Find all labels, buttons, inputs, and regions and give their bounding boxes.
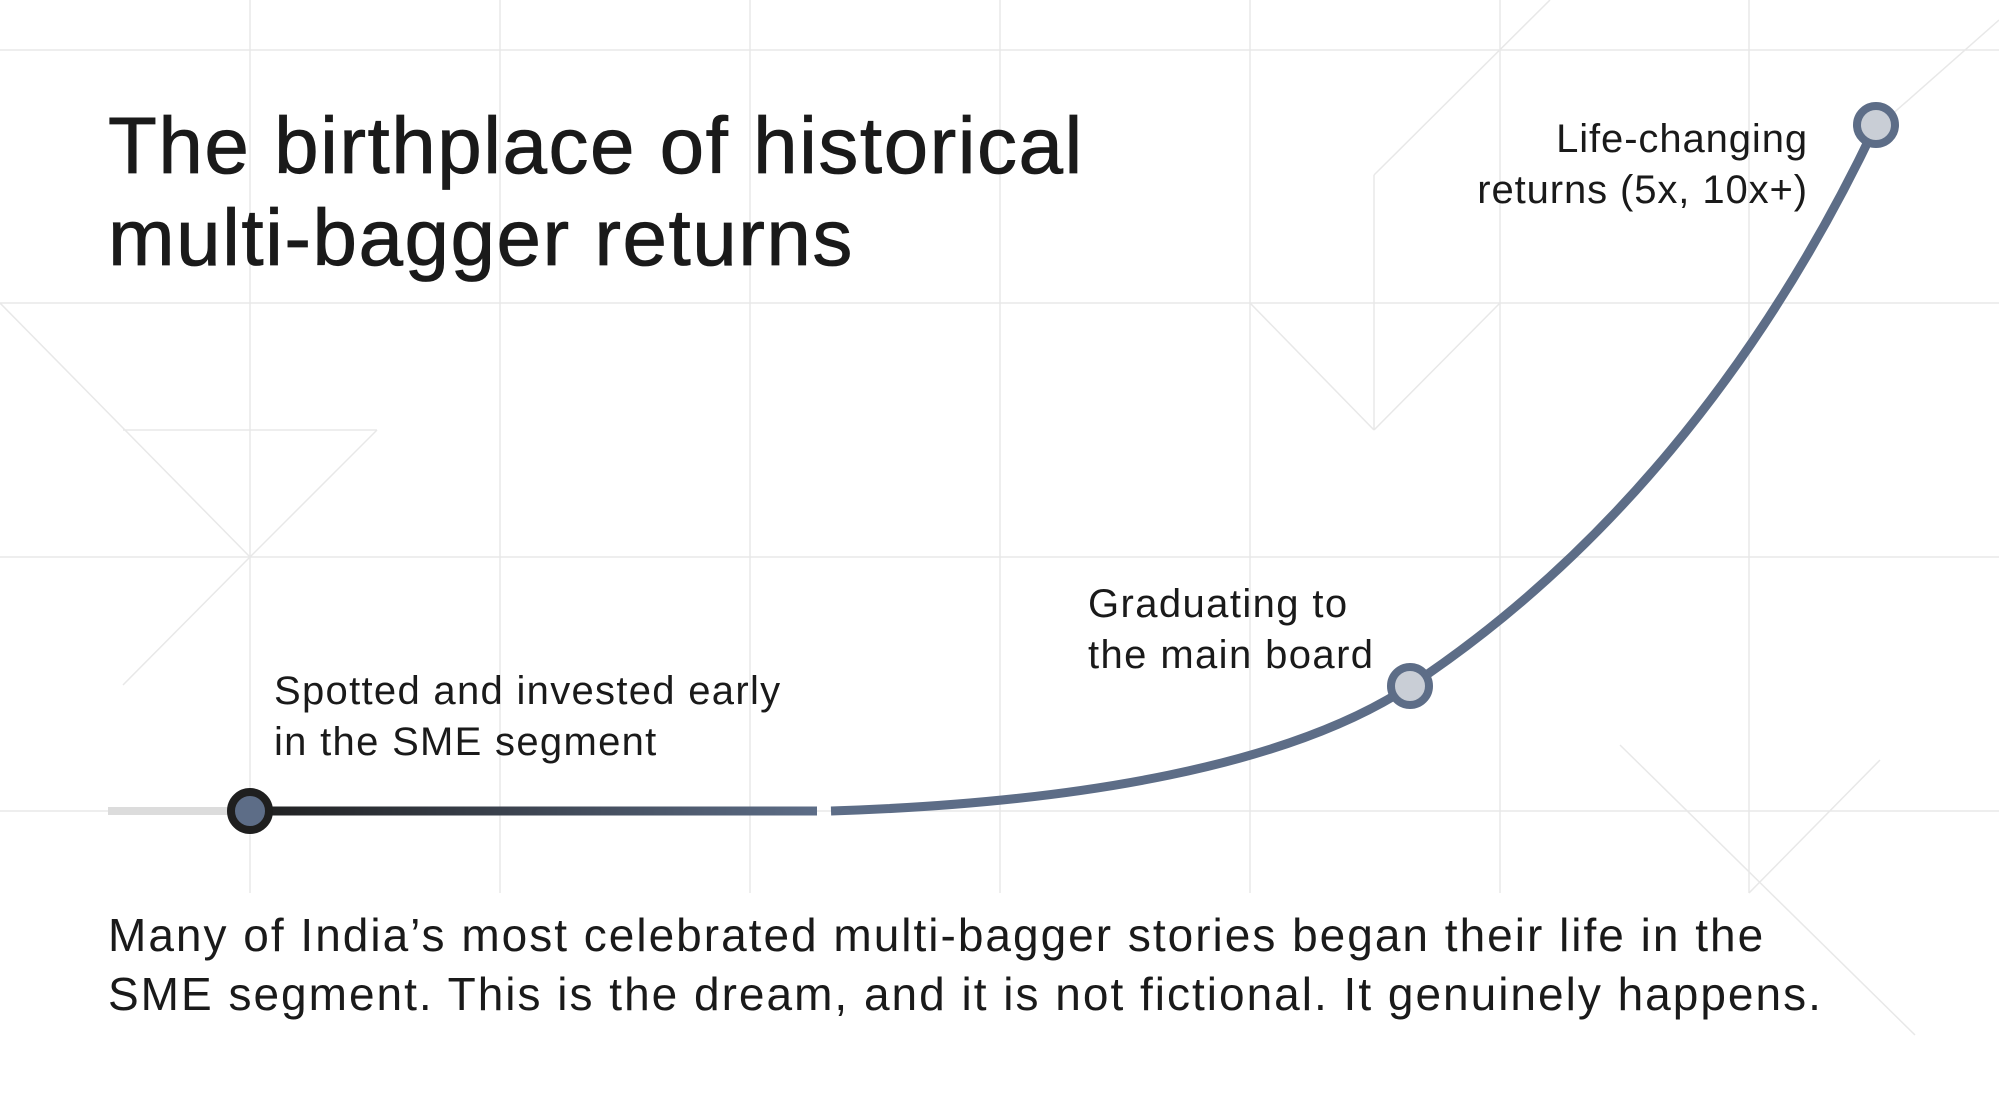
label: end [1477,117,1808,212]
label: start [274,669,781,764]
title: The birthplace of historical [108,101,1084,190]
label: start: in the SME segment [274,720,658,764]
label: mid [1088,582,1374,677]
label: mid: the main board [1088,633,1374,677]
bottom text [108,909,1823,1020]
label: start: Spotted and invested early [274,669,781,713]
label: end: Life-changing [1556,117,1808,161]
end dot [1857,106,1895,144]
label: mid: Graduating to [1088,582,1349,626]
start dot [231,792,269,830]
title [108,101,1084,282]
bottom text: Many of India’s most celebrated multi-bagger stories began their life in the [108,909,1765,961]
title: multi-bagger returns [108,193,854,282]
label: end: returns (5x, 10x+) [1477,168,1808,212]
bottom text: SME segment. This is the dream, and it is not fictional. It genuinely happens. [108,968,1823,1020]
mid dot [1391,667,1429,705]
